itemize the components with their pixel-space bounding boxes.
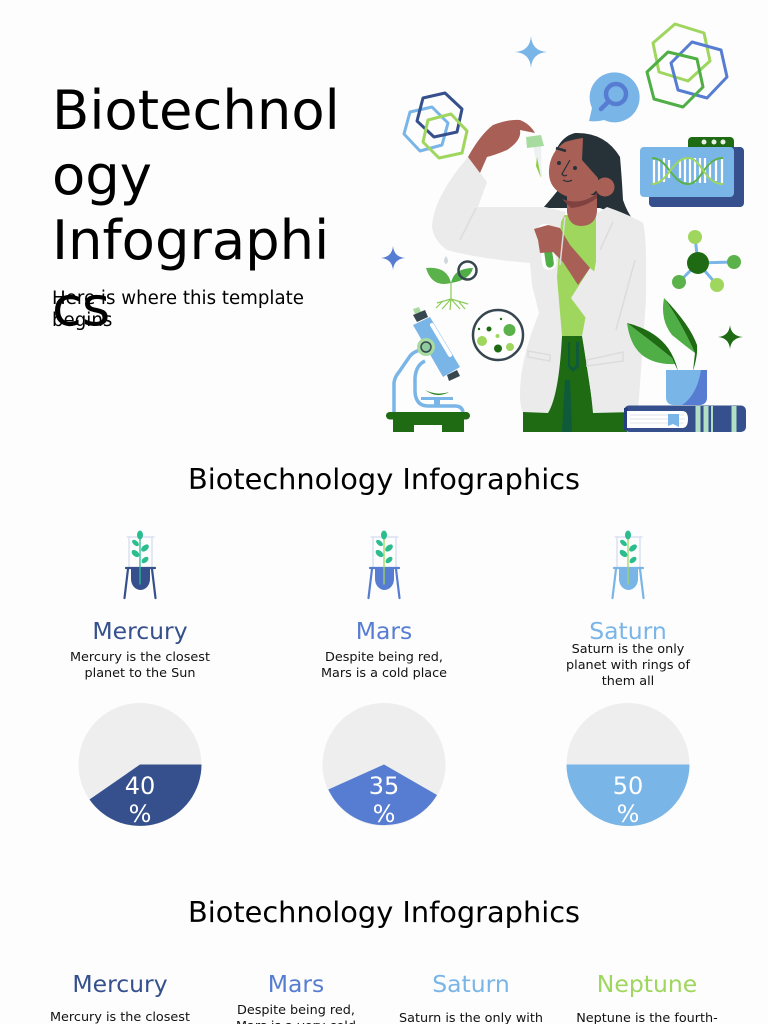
text: Saturn description: Saturn is the only planet with rings of them all: [566, 642, 690, 689]
icon: blue sparkle: [381, 246, 405, 270]
coat details: [528, 351, 623, 366]
subtitle: Here is where this template begins: [52, 288, 304, 331]
heading: section two: Biotechnology Infographics: [188, 895, 580, 929]
pie chart: 40 percent: [78, 703, 202, 826]
label: Neptune bottom: Neptune: [597, 970, 697, 998]
title: Infographics: [52, 209, 329, 338]
text: Mars bottom description: Despite being red,: [237, 1003, 355, 1018]
icon: light blue plant flask: [611, 530, 645, 600]
lab coat: [432, 157, 646, 413]
dropper: [533, 146, 542, 178]
icon: blue plant flask: [367, 530, 401, 600]
pie chart: 50 percent: [566, 703, 690, 826]
icon: sprout: [426, 256, 476, 310]
icon: microscope: [386, 307, 470, 432]
value: 35 percent: 35 %: [369, 772, 399, 828]
neck: [567, 195, 597, 226]
ear: [596, 178, 614, 196]
eyebrow: [556, 148, 566, 151]
label: Saturn: Saturn: [589, 617, 667, 645]
illustration: scientist and biotech objects: [381, 22, 746, 432]
value: 40 percent: 40 %: [125, 772, 155, 828]
label: Mars: Mars: [356, 617, 412, 645]
label: Mercury bottom: Mercury: [72, 970, 168, 998]
icon: top right hexagons: [647, 24, 727, 107]
heading: section one: Biotechnology Infographics: [188, 462, 580, 496]
folded sleeve: [571, 268, 628, 345]
lower hand: [534, 225, 590, 285]
label: Saturn bottom: Saturn: [432, 970, 510, 998]
trouser centre shade: [562, 342, 579, 432]
icon: molecule: [672, 230, 741, 292]
value: 50 percent: 50 %: [613, 772, 643, 828]
hair: [543, 133, 634, 221]
face: [549, 138, 598, 197]
icon: books: [624, 406, 746, 432]
title: [52, 79, 340, 338]
icon: navy plant flask: [123, 530, 157, 600]
title: Biotechnology: [52, 79, 340, 207]
text: Mars description: Despite being red,: [325, 650, 443, 665]
figure: scientist: [432, 120, 646, 432]
icon: petri dish: [473, 310, 523, 360]
test tube: [537, 223, 557, 271]
icon: light blue sparkle: [515, 36, 547, 68]
pie chart: 35 percent: [322, 703, 446, 826]
raised hand: [468, 120, 535, 173]
text: Mars description: [321, 650, 447, 681]
icon: left hexagons: [404, 93, 467, 158]
text: Mars description: Mars is a cold place: [321, 666, 447, 681]
trousers: [523, 335, 627, 432]
shirt: [556, 215, 596, 336]
icon: DNA screen: [640, 137, 744, 207]
text: Mercury description: Mercury is the closest planet to the Sun: [70, 650, 210, 681]
icon: magnifier speech bubble: [589, 72, 640, 122]
icon: potted plant: [627, 298, 707, 405]
icon: green sparkle: [718, 325, 743, 349]
label: Mars bottom: Mars: [268, 970, 324, 998]
eyes and mouth: [557, 161, 577, 170]
label: Mercury: Mercury: [92, 617, 188, 645]
